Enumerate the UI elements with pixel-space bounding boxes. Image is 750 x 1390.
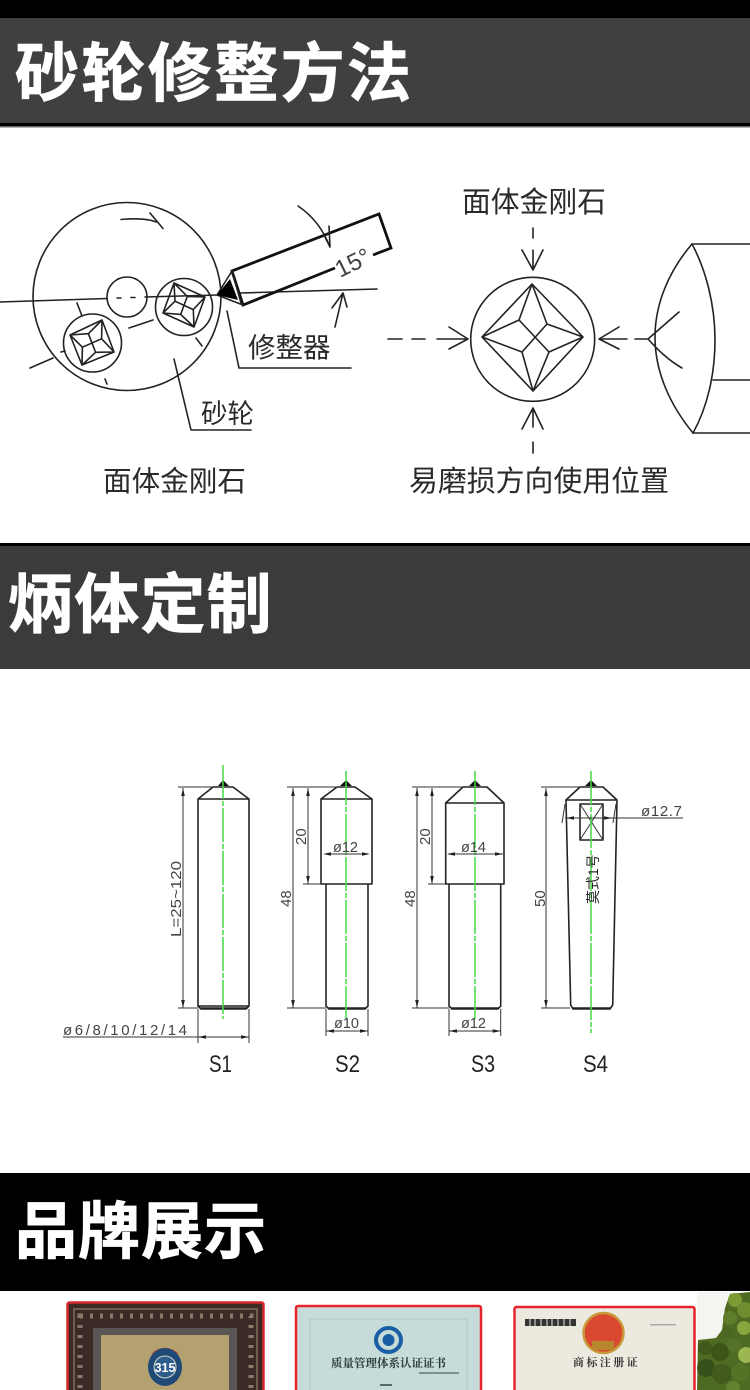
shank type S1	[63, 765, 249, 1078]
certificate: quality management system: 质量管理体系认证证书	[331, 1356, 446, 1370]
diamond in circle	[471, 277, 595, 401]
S3 dimensions	[412, 787, 503, 1036]
certificate: quality management system	[296, 1306, 481, 1390]
caption: face diamond top: 面体金刚石	[462, 187, 606, 219]
S3 label: S3	[471, 1051, 495, 1078]
shank type S2: ø12	[333, 840, 358, 856]
certificate: trademark registration	[514, 1307, 694, 1390]
certificate: 315 plaque: 315	[155, 1361, 175, 1375]
caption: wear direction position: 易磨损方向使用位置	[409, 466, 669, 498]
diagram: wheel dressing with tool at 15 degrees	[0, 202, 391, 498]
S1 label: S1	[209, 1051, 232, 1078]
shank type S2: 20	[293, 828, 310, 845]
label: dresser	[227, 311, 351, 368]
shank type S4	[532, 771, 683, 1078]
dashed arrows pointing to the diamond	[388, 228, 648, 453]
S4 dimensions	[541, 787, 683, 1008]
diamond facets, right	[163, 283, 205, 327]
shank type S1: L=25~120	[168, 861, 185, 937]
shank type S4: 莫式1号	[585, 854, 601, 904]
label: dresser: 修整器	[248, 332, 330, 363]
header band: grinding wheel dressing method: 砂轮修整方法	[15, 38, 413, 110]
15 degree angle annotation	[298, 206, 375, 327]
S1 dimensions	[63, 787, 249, 1043]
shank type S4: 50	[532, 890, 549, 907]
wheel side view	[648, 244, 750, 433]
shank type S3: 48	[402, 890, 419, 907]
S1 outline	[198, 787, 249, 1009]
shank type S3: ø12	[461, 1016, 486, 1032]
S4 outline	[566, 787, 617, 1009]
caption: face diamond: 面体金刚石	[103, 466, 246, 498]
shank type S1: ø6/8/10/12/14	[63, 1022, 187, 1039]
S4 label: S4	[583, 1051, 608, 1078]
15 degree angle annotation: 15°	[331, 243, 375, 283]
S3 outline	[446, 787, 504, 1009]
S2 label: S2	[335, 1051, 360, 1078]
diamond facets, left	[70, 320, 114, 365]
S2 outline	[321, 787, 372, 1009]
label: grinding wheel	[174, 359, 254, 430]
wheel with embedded diamonds	[0, 202, 377, 390]
shank type S3	[402, 771, 504, 1078]
diagram: wear direction and position	[388, 187, 750, 498]
shank type S2: 48	[278, 890, 295, 907]
tree photo	[697, 1292, 750, 1390]
header band: shank customization: 炳体定制	[8, 568, 273, 641]
header band: grinding wheel dressing method	[0, 0, 750, 128]
dresser tool	[217, 214, 391, 305]
header band: brand showcase: 品牌展示	[15, 1198, 267, 1267]
shank type S2	[278, 771, 372, 1078]
S2 dimensions	[287, 787, 368, 1036]
shank type S3: ø14	[461, 840, 486, 856]
certificate: trademark registration: 商标注册证	[573, 1355, 640, 1369]
shank type S2: ø10	[334, 1016, 359, 1032]
shank type S4: ø12.7	[641, 803, 682, 820]
header band: brand showcase	[0, 1173, 750, 1291]
certificate: 315 plaque	[68, 1302, 264, 1390]
header band: shank customization	[0, 543, 750, 669]
label: grinding wheel: 砂轮	[201, 399, 254, 429]
shank type S3: 20	[417, 828, 434, 845]
